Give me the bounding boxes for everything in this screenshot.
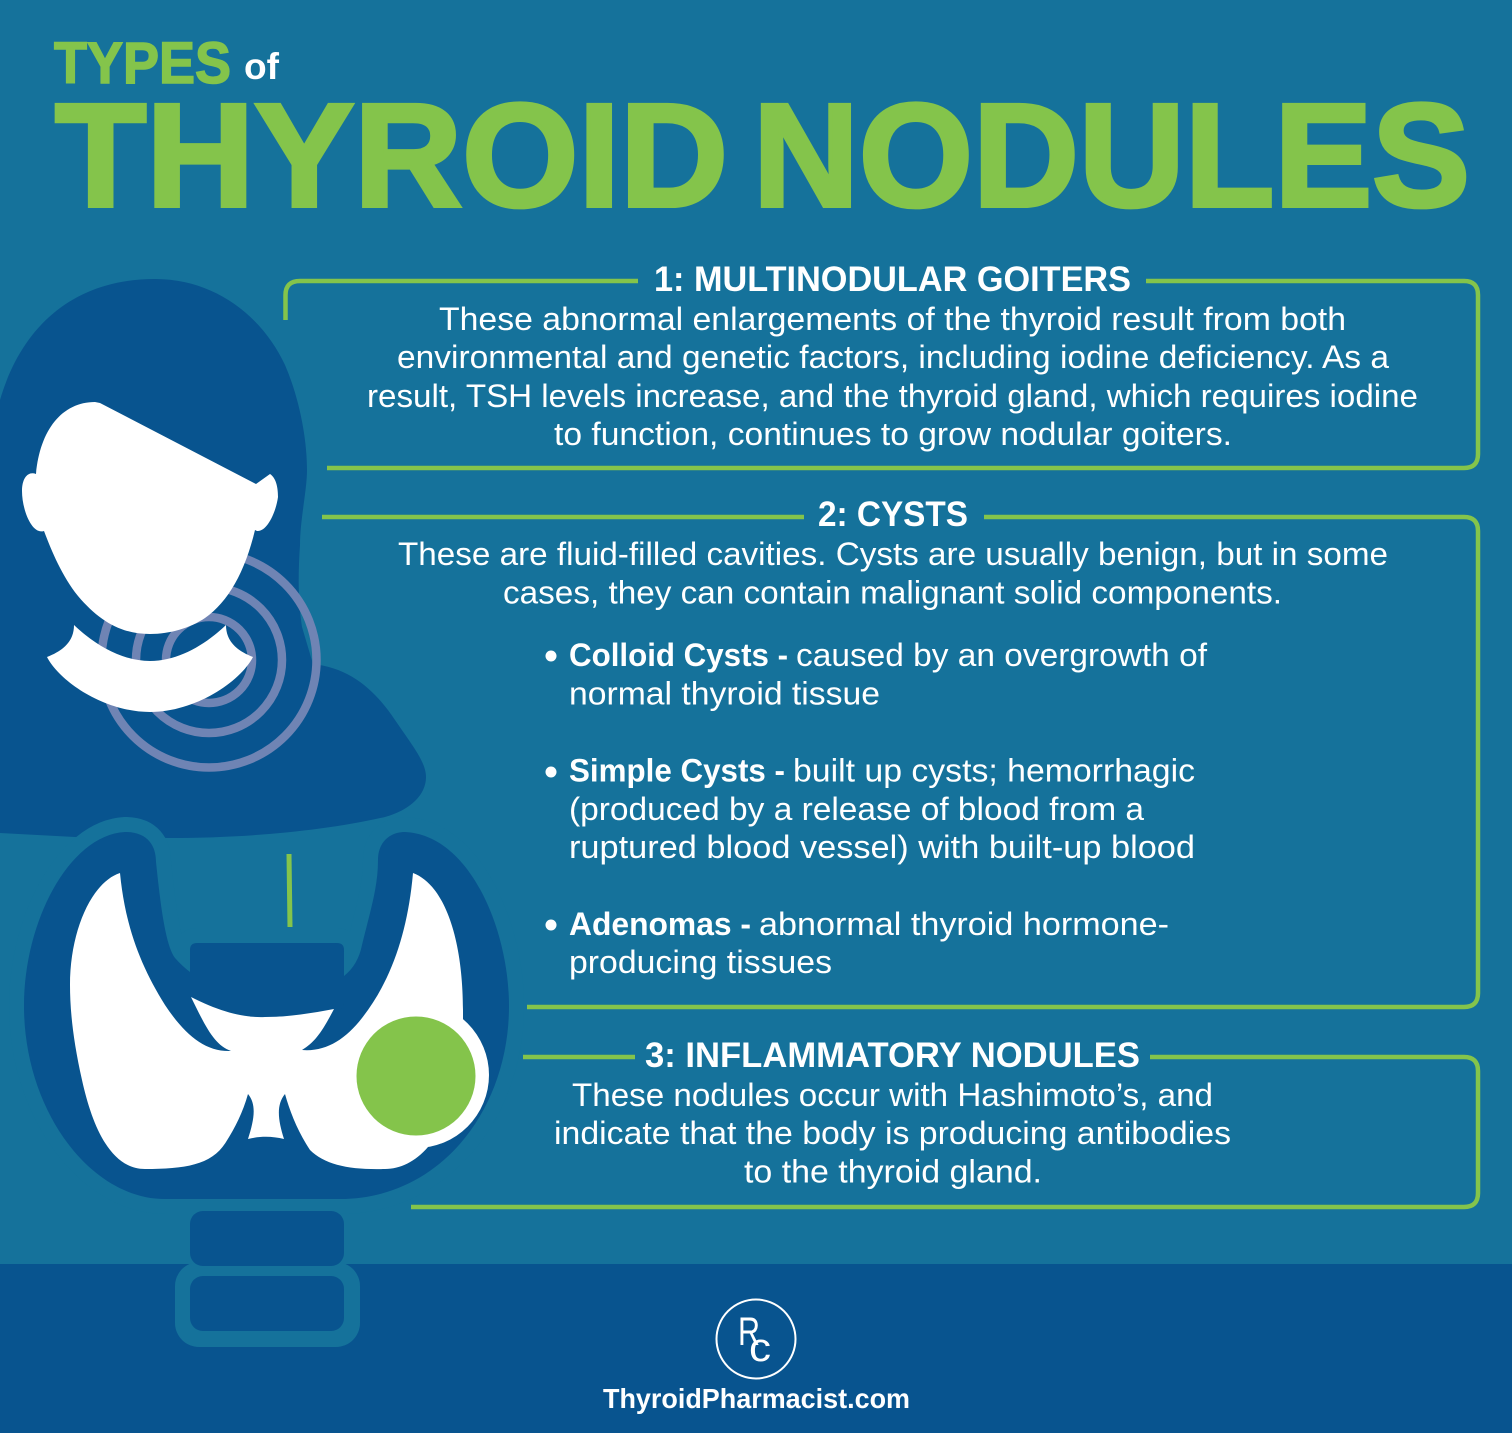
- panel: cysts: 2: CYSTS: [818, 495, 968, 534]
- panel: inflammatory nodules: [411, 1036, 1478, 1207]
- panel: multinodular goiters: to function, continues to grow nodular goiters.: [554, 416, 1232, 452]
- trachea ring: [190, 1211, 344, 1266]
- adenomas bullet: [546, 906, 1169, 980]
- colloid cysts bullet: Colloid Cysts -: [569, 637, 788, 673]
- colloid cysts bullet: [546, 637, 1208, 712]
- icon: woman with neck rings: [0, 279, 426, 838]
- footer website: ThyroidPharmacist.com: [603, 1383, 910, 1414]
- connector line: [289, 854, 290, 927]
- colloid cysts bullet: normal thyroid tissue: [569, 676, 880, 712]
- footer band: [0, 1264, 1512, 1433]
- panel: multinodular goiters: 1: MULTINODULAR GOITERS: [654, 260, 1131, 299]
- footer logo: c: [749, 1326, 771, 1370]
- panel: cysts: [322, 495, 1478, 1007]
- panel: cysts: These are fluid-filled cavities. Cysts are usually benign, but in some: [398, 536, 1388, 572]
- panel: inflammatory nodules: 3: INFLAMMATORY NODULES: [645, 1036, 1140, 1075]
- title: NODULES: [753, 74, 1470, 238]
- face: [22, 402, 278, 634]
- adenomas bullet: Adenomas -: [569, 906, 751, 942]
- simple cysts bullet: [546, 752, 1195, 865]
- panel: multinodular goiters: These abnormal enlargements of the thyroid result from both: [439, 301, 1346, 337]
- trachea ring: [190, 1276, 344, 1331]
- title: THYROID: [55, 74, 728, 238]
- panel: multinodular goiters: environmental and genetic factors, including iodine deficiency. As a: [397, 339, 1390, 375]
- title: TYPES: [54, 31, 231, 96]
- gland outline: [24, 832, 509, 1199]
- adenomas bullet: abnormal thyroid hormone-: [759, 906, 1169, 942]
- hair and shoulders: [0, 279, 426, 838]
- trachea upper block: [190, 943, 344, 1013]
- nodule halo: [343, 1002, 489, 1148]
- neck rings: [102, 552, 316, 768]
- panel: inflammatory nodules: to the thyroid gland.: [744, 1154, 1042, 1190]
- collar: [47, 625, 253, 712]
- simple cysts bullet: Simple Cysts -: [569, 752, 785, 788]
- simple cysts bullet: (produced by a release of blood from a: [569, 791, 1145, 827]
- trachea lower ring halo: [175, 1262, 360, 1347]
- simple cysts bullet: built up cysts; hemorrhagic: [793, 752, 1195, 788]
- title: of: [244, 46, 280, 87]
- panel: cysts: cases, they can contain malignant solid components.: [503, 574, 1282, 610]
- thyroid lobes: [70, 873, 463, 1169]
- footer logo: [716, 1300, 796, 1378]
- panel: multinodular goiters: [286, 260, 1478, 468]
- panel: inflammatory nodules: indicate that the body is producing antibodies: [554, 1115, 1231, 1151]
- colloid cysts bullet: caused by an overgrowth of: [796, 637, 1208, 673]
- title: [54, 31, 1470, 238]
- footer logo: R: [738, 1310, 760, 1354]
- simple cysts bullet: ruptured blood vessel) with built-up blood: [569, 829, 1195, 865]
- adenomas bullet: producing tissues: [569, 944, 832, 980]
- icon: thyroid gland: [24, 832, 509, 1347]
- panel: inflammatory nodules: These nodules occur with Hashimoto’s, and: [572, 1077, 1213, 1113]
- nodule: [356, 1016, 476, 1136]
- panel: multinodular goiters: result, TSH levels increase, and the thyroid gland, which requires iodine: [367, 378, 1418, 414]
